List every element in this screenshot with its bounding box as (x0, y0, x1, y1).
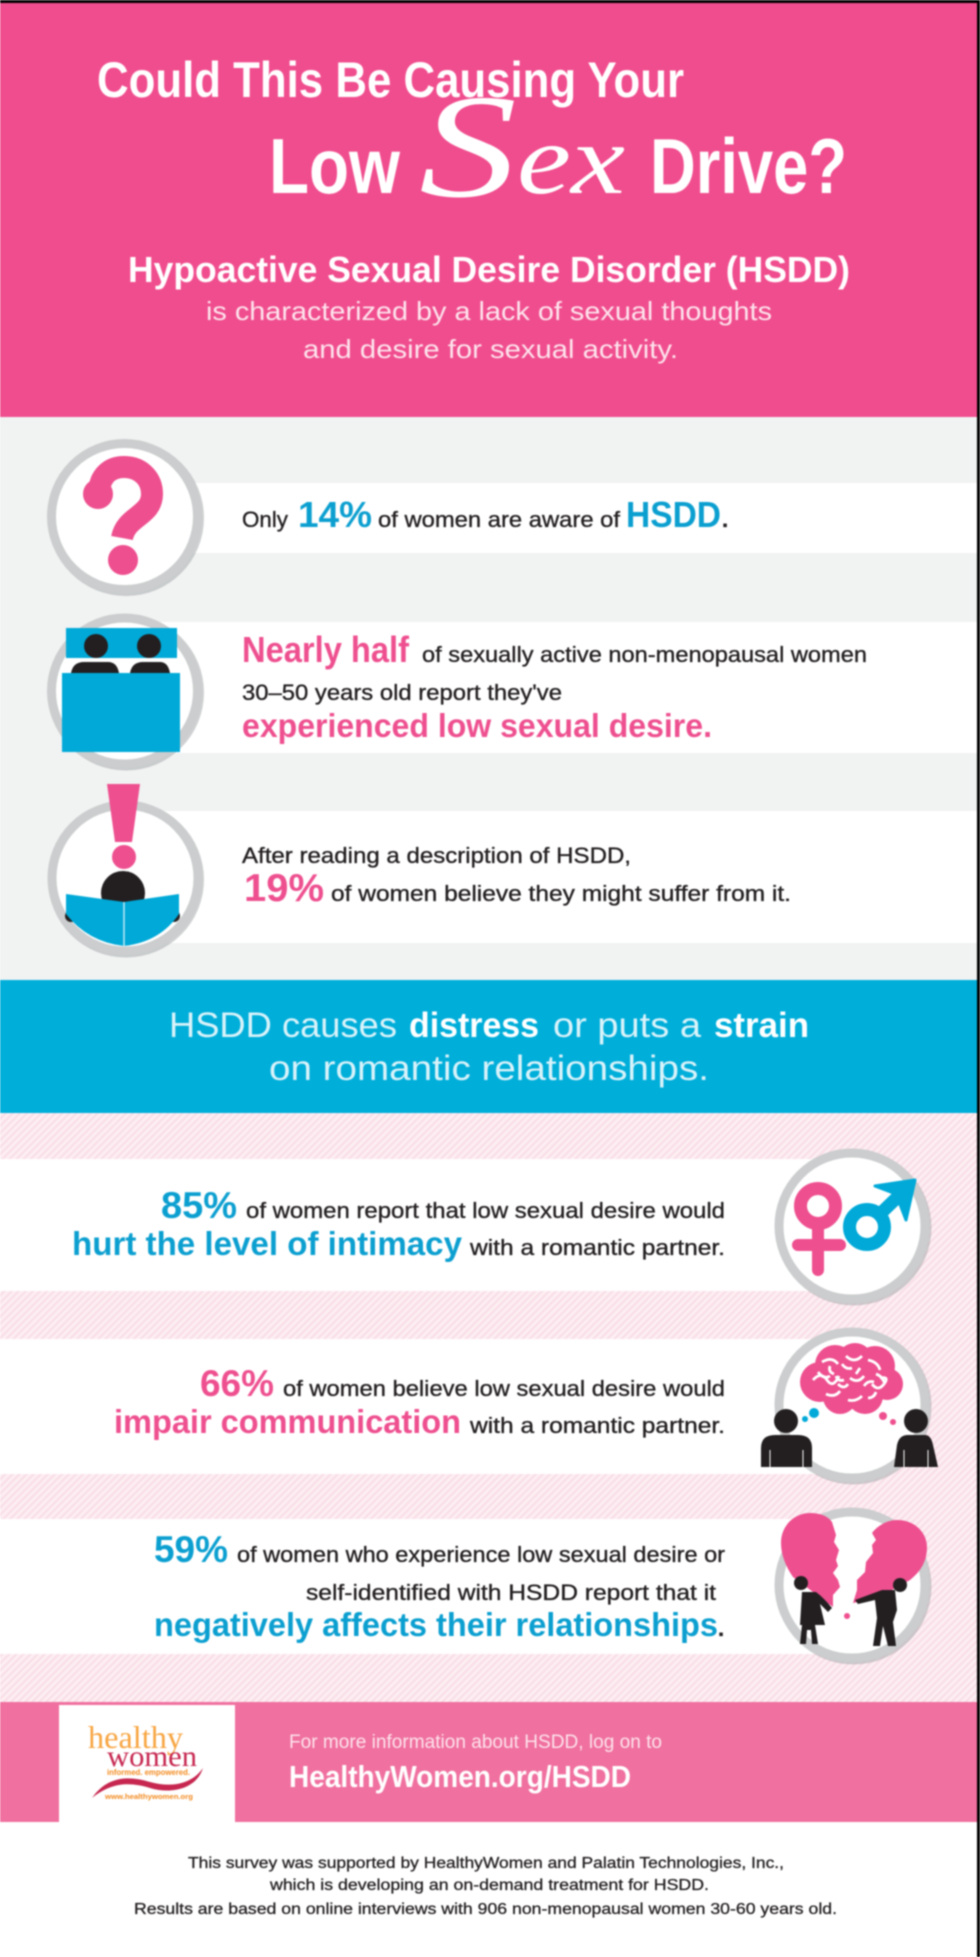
panel: awareness statistics (0, 417, 980, 980)
title line two (269, 65, 847, 229)
row: nearly half: of sexually active non-menopausal women (422, 642, 867, 667)
row: 59 percent: . (718, 1616, 724, 1641)
row: 85 percent: with a romantic partner. (469, 1235, 725, 1260)
footnote: which is developing an on-demand treatment for HSDD. (269, 1877, 709, 1894)
logo: HealthyWomen: women (107, 1740, 197, 1773)
footnote (134, 1855, 837, 1918)
row: 19 percent: of women believe they might suffer from it. (331, 881, 791, 906)
row: 59 percent: of women who experience low sexual desire or (237, 1542, 725, 1567)
definition text (206, 296, 772, 364)
row: nearly half (124, 622, 980, 753)
row: nearly half: 30–50 years old report they've (242, 680, 562, 705)
logo: HealthyWomen: informed. empowered. (107, 1768, 190, 1777)
row: 66 percent: impair communication (114, 1403, 461, 1440)
row: 59 percent: negatively affects their relationships (154, 1606, 718, 1643)
row: 59 percent (0, 1519, 852, 1654)
call to action: For more information about HSDD, log on to (289, 1732, 662, 1753)
icon: question mark (48, 440, 204, 596)
row: 14 percent aware: HSDD (626, 494, 721, 535)
panel: blue banner: strain (714, 1006, 809, 1045)
panel: pink header (0, 0, 980, 417)
icon: person reading with exclamation mark (48, 784, 204, 958)
row: 66 percent: of women believe low sexual desire would (283, 1376, 725, 1401)
panel: footer banner (0, 1702, 980, 1822)
icon: broken heart with two figures (776, 1508, 932, 1664)
row: 14 percent aware: Only (242, 507, 288, 532)
row: 85 percent: of women report that low sexual desire would (246, 1198, 725, 1223)
panel: blue banner (0, 980, 980, 1113)
row: 14 percent aware: 14% (298, 494, 372, 535)
panel: blue banner: on romantic relationships. (269, 1049, 709, 1088)
title line two: ex (517, 104, 625, 215)
row: 19 percent (124, 811, 980, 943)
panel: blue banner: HSDD causes (169, 1006, 397, 1045)
row: 19 percent: After reading a description of HSDD, (242, 843, 631, 868)
title line two: S (419, 65, 517, 229)
call to action: HealthyWomen.org/HSDD (289, 1759, 631, 1794)
definition text: is characterized by a lack of sexual thoughts (206, 296, 772, 326)
row: 66 percent: 66% (200, 1363, 274, 1404)
row: 14 percent aware: . (722, 507, 728, 532)
title line two: Low (269, 122, 400, 210)
logo: HealthyWomen: www.healthywomen.org (104, 1794, 193, 1801)
title line one: Could This Be Causing Your (97, 52, 684, 108)
row: 19 percent: 19% (244, 867, 324, 910)
logo: HealthyWomen (59, 1705, 235, 1822)
row: 66 percent: with a romantic partner. (469, 1413, 725, 1438)
row: 66 percent (0, 1339, 852, 1474)
icon: couple in bed (48, 614, 204, 770)
title line two: Drive? (650, 122, 847, 210)
row: nearly half: Nearly half (242, 629, 410, 670)
footnote: This survey was supported by HealthyWomen and Palatin Technologies, Inc., (188, 1855, 784, 1872)
panel: blue banner: distress (409, 1006, 539, 1045)
row: 59 percent: self-identified with HSDD report that it (306, 1580, 716, 1605)
row: 85 percent: 85% (161, 1185, 237, 1226)
panel: blue banner: or puts a (553, 1006, 702, 1045)
footnote: Results are based on online interviews with 906 non-menopausal women 30-60 years old. (134, 1901, 837, 1918)
icon: gender symbols (776, 1150, 932, 1306)
row: 85 percent: hurt the level of intimacy (72, 1225, 463, 1262)
row: 14 percent aware (124, 483, 980, 553)
row: 85 percent (0, 1159, 852, 1291)
row: 59 percent: 59% (154, 1529, 228, 1570)
subtitle: Hypoactive Sexual Desire Disorder (HSDD) (128, 249, 850, 290)
call to action (289, 1732, 662, 1794)
panel: relationship statistics (0, 1113, 980, 1702)
logo: HealthyWomen: healthy (88, 1719, 183, 1755)
row: nearly half: experienced low sexual desire. (242, 707, 712, 744)
definition text: and desire for sexual activity. (303, 334, 678, 364)
row: 14 percent aware: of women are aware of (378, 507, 621, 532)
icon: two people with brain thought bubble (761, 1328, 938, 1484)
